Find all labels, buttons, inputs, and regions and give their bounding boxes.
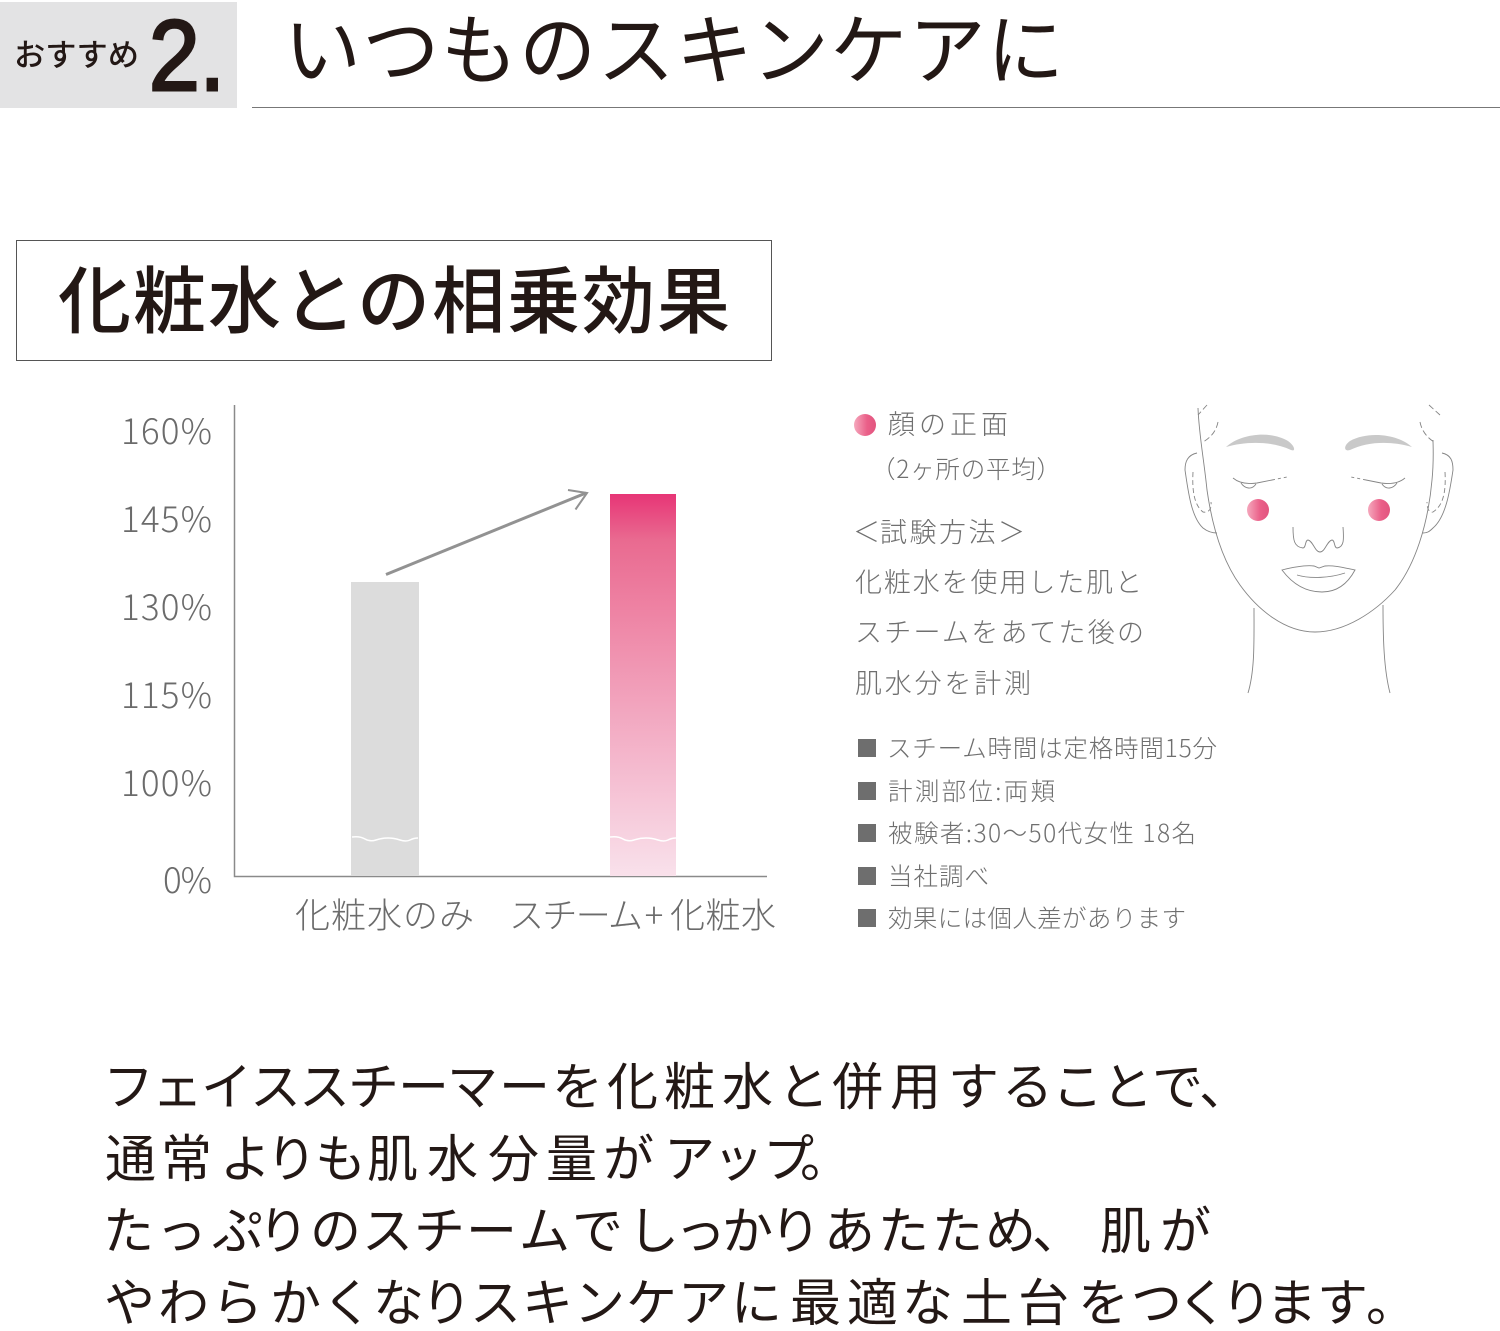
test condition list — [858, 730, 1217, 935]
heading box: synergy with lotion: 化粧水との相乗効果 — [58, 243, 730, 349]
badge: recommendation 2: 2. — [149, 0, 225, 112]
eyebrows — [1226, 435, 1294, 450]
x-axis label: steam plus lotion: + — [645, 888, 663, 939]
y-axis labels: 145% — [121, 492, 212, 543]
badge: recommendation 2 — [0, 0, 237, 112]
body text: 通常よりも肌水分量がアップ。 — [105, 1118, 851, 1192]
y-axis labels — [121, 404, 212, 904]
test condition list: 効果には個人差があります — [888, 900, 1186, 935]
arrow — [386, 490, 587, 574]
body text: フェイススチーマーを化粧水と併用することで、 — [103, 1046, 1250, 1120]
face outline — [1198, 408, 1433, 632]
neck — [1248, 605, 1390, 693]
test method text: 化粧水を使用した肌と — [855, 561, 1142, 600]
y-axis labels: 115% — [121, 668, 212, 719]
face illustration — [1185, 405, 1453, 693]
legend: front of face: 顔の正面 — [888, 403, 1008, 442]
y-axis labels: 130% — [121, 580, 212, 631]
test condition list: スチーム時間は定格時間15分 — [887, 730, 1217, 765]
y-axis labels: 100% — [121, 756, 212, 807]
legend: front of face — [854, 403, 1061, 486]
y-axis labels: 0% — [163, 853, 212, 904]
y-axis labels: 160% — [121, 404, 212, 455]
x-axis label: steam plus lotion: スチーム — [509, 888, 643, 939]
chart axes — [234, 405, 767, 876]
body text — [103, 1046, 1417, 1331]
ears — [1185, 453, 1453, 533]
body text: たっぷりのスチームでしっかりあたため、肌が — [103, 1190, 1211, 1264]
bar: steam plus lotion — [610, 494, 676, 876]
lips — [1282, 566, 1355, 592]
test condition list: 当社調べ — [888, 858, 989, 893]
legend: front of face: （2ヶ所の平均） — [871, 451, 1061, 486]
x-axis label: steam plus lotion — [509, 888, 776, 939]
bar chart — [121, 404, 776, 939]
hairline — [1198, 405, 1440, 442]
test method text — [853, 511, 1144, 701]
badge: recommendation 2: おすすめ — [14, 30, 139, 75]
cheek markers — [1247, 499, 1269, 521]
x-axis label: lotion only: 化粧水のみ — [295, 888, 474, 939]
test method text: スチームをあてた後の — [855, 611, 1144, 650]
test method text: 肌水分を計測 — [855, 662, 1031, 701]
test method text: ＜試験方法＞ — [853, 511, 1025, 550]
x-axis label: steam plus lotion: 化粧水 — [670, 888, 776, 939]
nose — [1293, 527, 1343, 552]
inner ears — [1193, 472, 1445, 512]
bar: lotion only — [351, 582, 419, 876]
closed eyes — [1233, 478, 1405, 488]
test condition list: 計測部位:両頬 — [888, 773, 1055, 808]
test condition list: 被験者:30〜50代女性 18名 — [888, 815, 1196, 850]
